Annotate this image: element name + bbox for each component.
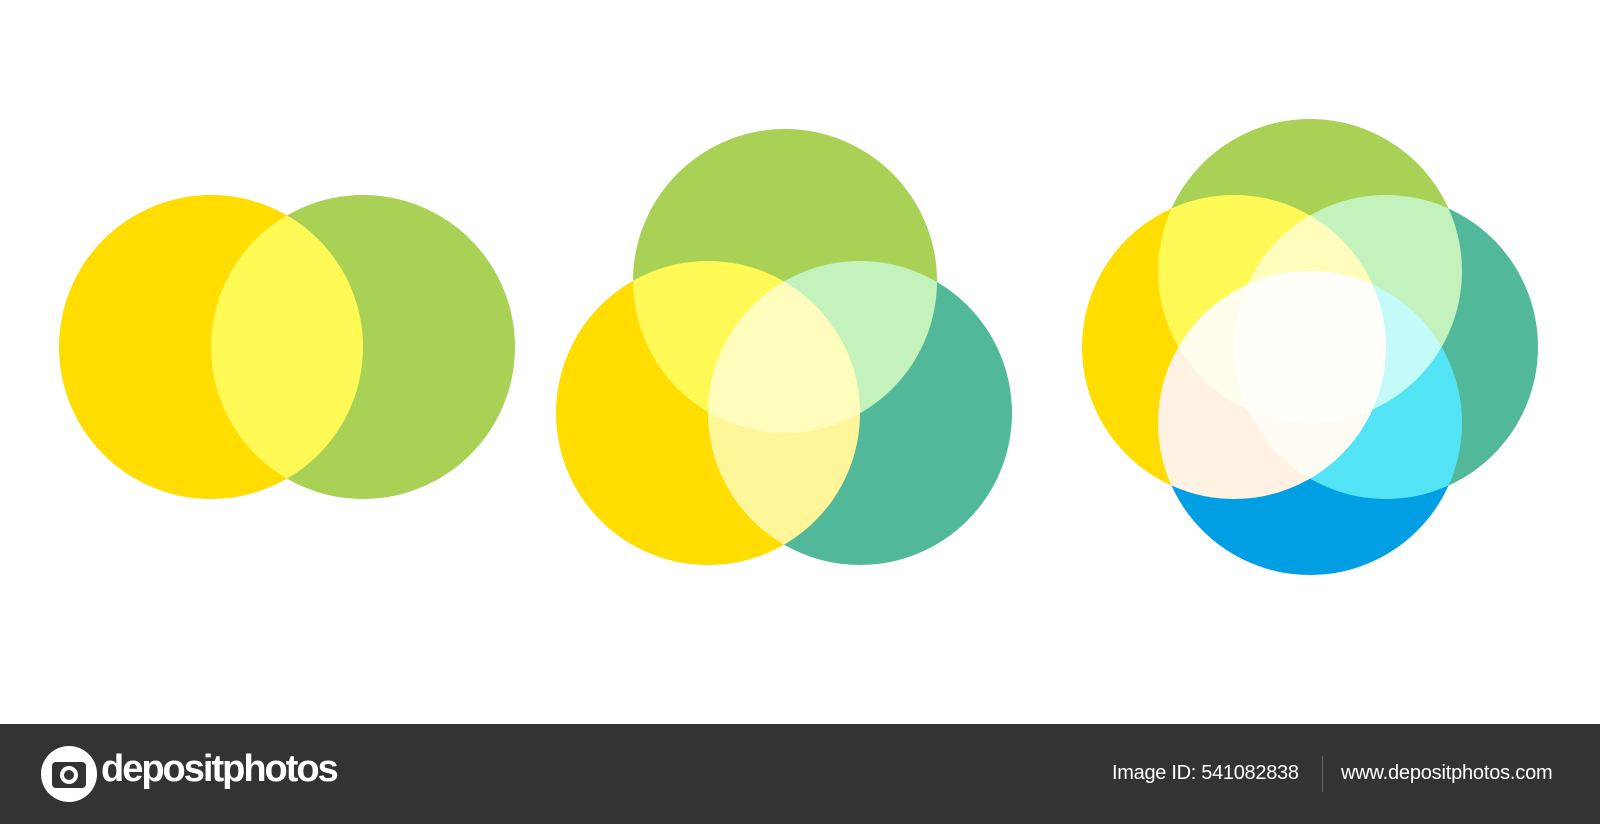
diagram: two circles <box>59 195 515 499</box>
icon: camera logo <box>41 746 97 802</box>
footer bar <box>0 724 1600 824</box>
brand name: depositphotos <box>101 748 337 790</box>
image id: Image ID: 541082838 <box>1112 762 1299 784</box>
diagram: four circles <box>1082 119 1538 575</box>
website url: www.depositphotos.com <box>1341 762 1552 784</box>
diagram: three circles <box>556 129 1012 565</box>
